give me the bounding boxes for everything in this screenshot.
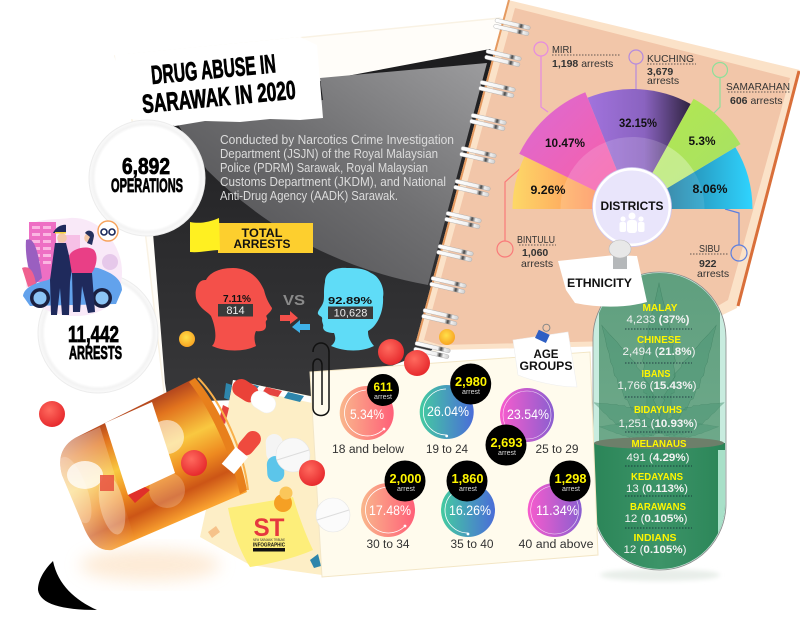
age group: 19 to 24 xyxy=(420,364,491,456)
stat: arrests: ARRESTS xyxy=(69,343,122,363)
district labels: MIRI xyxy=(552,44,572,56)
icon: blue capsule xyxy=(265,434,285,482)
districts fan chart: 9.26% xyxy=(530,185,566,197)
ethnicity list: BIDAYUHS xyxy=(634,404,682,416)
arrows xyxy=(280,311,310,333)
peach notebook page xyxy=(415,0,800,350)
age group: 35 to 40: arrest xyxy=(459,486,477,493)
total arrests banner xyxy=(190,218,313,253)
age group: 30 to 34: 2,000 xyxy=(390,472,422,486)
age group: 30 to 34: 30 to 34 xyxy=(366,539,410,551)
icon: tablet two xyxy=(316,498,350,532)
icon: pushpin xyxy=(274,486,292,512)
ethnicity list: 1,766 (15.43%) xyxy=(618,380,696,392)
description text: Conducted by Narcotics Crime Investigation xyxy=(220,133,454,147)
age group: 25 to 29: 2,693 xyxy=(490,436,523,450)
spiral binding rings xyxy=(413,18,531,359)
age group: 18 and below: 5.34% xyxy=(350,407,384,422)
description text xyxy=(220,133,454,203)
districts fan chart: 5.3% xyxy=(688,136,716,148)
total arrests banner: TOTAL xyxy=(242,228,282,240)
title: DRUG ABUSE IN xyxy=(150,48,277,90)
age group: 40 and above: 40 and above xyxy=(518,539,594,551)
icon: paper clip xyxy=(313,343,329,416)
description text: Department (JSJN) of the Royal Malaysian xyxy=(220,147,438,161)
ethnicity list: INDIANS xyxy=(634,532,676,544)
ethnicity list: 12 (0.105%) xyxy=(624,513,688,525)
description text: Customs Department (JKDM), and National xyxy=(220,175,446,189)
icon: pill bottle xyxy=(52,378,248,550)
age group: 30 to 34: 17.48% xyxy=(369,503,411,518)
district leader lines and nodes xyxy=(497,42,747,261)
stat: arrests xyxy=(38,273,158,393)
ethnicity list: 2,494 (21.8%) xyxy=(622,346,696,358)
age group: 35 to 40 xyxy=(441,460,495,551)
female head, 7.11% xyxy=(196,268,272,350)
district labels: 606 arrests xyxy=(730,95,783,107)
age group: 35 to 40: 1,860 xyxy=(452,472,484,486)
grey diagonal sheen xyxy=(175,63,487,285)
age groups note xyxy=(513,322,577,387)
ethnicity list: 13 (0.113%) xyxy=(626,483,688,495)
districts fan chart xyxy=(512,89,752,209)
age group: 30 to 34 xyxy=(361,460,426,551)
age group: 25 to 29: 23.54% xyxy=(507,407,549,422)
age group: 18 and below xyxy=(332,374,405,456)
yellow ball right xyxy=(439,329,455,345)
district labels xyxy=(517,44,790,280)
ethnicity list: MALAY xyxy=(642,302,678,314)
ethnicity list: BARAWANS xyxy=(630,501,686,513)
age group: 25 to 29: 25 to 29 xyxy=(536,444,578,456)
districts fan chart: 8.06% xyxy=(692,184,728,196)
ethnicity list xyxy=(618,302,698,556)
title xyxy=(141,48,297,119)
district labels: SAMARAHAN xyxy=(726,81,790,93)
icon: police arrest illustration xyxy=(22,218,122,316)
ethnicity list: 491 (4.29%) xyxy=(626,452,690,464)
district labels: 1,060 xyxy=(522,247,548,259)
sticky note: INFOGRAPHIC xyxy=(253,542,285,548)
district labels: BINTULU xyxy=(517,234,555,246)
district labels: 3,679 xyxy=(647,66,673,78)
ethnicity note xyxy=(558,255,647,307)
total arrests banner: ARRESTS xyxy=(234,239,291,251)
age group: 25 to 29 xyxy=(486,388,578,466)
stat: operations: OPERATIONS xyxy=(111,176,183,197)
icon: silver pin xyxy=(609,240,631,269)
ethnicity list: 12 (0.105%) xyxy=(624,544,686,556)
age group: 19 to 24: 2,980 xyxy=(455,375,487,389)
blackboard panel xyxy=(140,49,500,402)
icon: tablet one xyxy=(276,438,310,472)
soft bottle shadow xyxy=(80,549,220,581)
districts fan chart: 10.47% xyxy=(545,138,585,150)
ethnicity list: 4,233 (37%) xyxy=(626,314,690,326)
envelope xyxy=(200,380,334,575)
age group: 35 to 40: 35 to 40 xyxy=(450,539,494,551)
ethnicity list: KEDAYANS xyxy=(631,471,683,483)
age groups note: GROUPS xyxy=(520,359,572,373)
district labels: arrests xyxy=(521,258,553,270)
sticky note: NEW SARAWAK TRIBUNE xyxy=(253,538,285,542)
district labels: 922 xyxy=(699,258,717,270)
age group: 25 to 29: arrest xyxy=(498,450,516,457)
ethnicity note: ETHNICITY xyxy=(567,278,632,290)
description text: Police (PDRM) Sarawak, Royal Malaysian xyxy=(220,161,428,175)
age group: 19 to 24: 26.04% xyxy=(427,404,469,419)
districts fan chart: 32.15% xyxy=(619,118,657,130)
ethnicity capsule xyxy=(589,272,729,581)
ethnicity list: MELANAUS xyxy=(632,438,686,450)
age group: 40 and above: arrest xyxy=(562,486,580,493)
age group: 18 and below: 18 and below xyxy=(332,444,405,456)
black corner shape xyxy=(38,561,97,610)
district labels: arrests xyxy=(647,75,679,87)
age group: 40 and above: 11.34% xyxy=(536,503,578,518)
back page of notebook xyxy=(115,18,520,400)
female head, 7.11%: 814 xyxy=(226,305,245,317)
icon: capsule on envelope xyxy=(229,376,279,416)
age groups note: AGE xyxy=(534,347,558,361)
male head, 92.89% xyxy=(318,268,383,350)
age group: 19 to 24: arrest xyxy=(462,389,480,396)
red balls xyxy=(39,339,430,486)
stat: operations: 6,892 xyxy=(122,153,170,179)
age group: 19 to 24: 19 to 24 xyxy=(426,444,469,456)
vs label: VS xyxy=(283,292,305,309)
title: SARAWAK IN 2020 xyxy=(141,75,297,119)
male head, 92.89%: 92.89% xyxy=(328,295,373,307)
age group: 40 and above xyxy=(518,460,594,551)
age groups paper xyxy=(310,352,598,577)
district labels: KUCHING xyxy=(647,53,694,65)
sticky note: ST xyxy=(254,514,284,542)
icon: capsule at bottle mouth xyxy=(222,428,264,474)
age group: 35 to 40: 16.26% xyxy=(449,503,491,518)
age group: 18 and below: 611 xyxy=(374,380,393,394)
stat: arrests: 11,442 xyxy=(68,321,119,347)
male head, 92.89%: 10,628 xyxy=(334,308,367,320)
districts hub: DISTRICTS xyxy=(600,201,664,213)
torn title note xyxy=(115,37,323,126)
ethnicity list: 1,251 (10.93%) xyxy=(618,418,698,430)
districts hub xyxy=(592,168,672,246)
stat: operations xyxy=(89,120,205,236)
district labels: arrests xyxy=(697,268,729,280)
district labels: 1,198 arrests xyxy=(552,58,613,70)
ethnicity list: IBANS xyxy=(642,368,670,380)
sticky note xyxy=(228,497,313,567)
icon: red ball in bottle xyxy=(181,450,207,476)
age group: 30 to 34: arrest xyxy=(397,486,415,493)
ethnicity list: CHINESE xyxy=(637,334,681,346)
age group: 18 and below: arrest xyxy=(374,394,392,401)
description text: Anti-Drug Agency (AADK) Sarawak. xyxy=(220,189,398,203)
yellow ball left xyxy=(179,331,195,347)
female head, 7.11%: 7.11% xyxy=(223,293,252,305)
district labels: SIBU xyxy=(699,243,720,255)
age group: 40 and above: 1,298 xyxy=(554,472,587,486)
